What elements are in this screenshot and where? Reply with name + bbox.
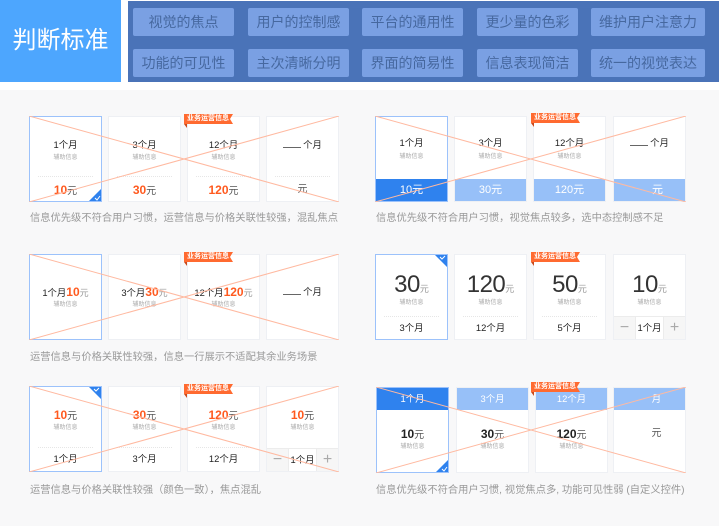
card: 10 yuan with stepper: 辅助信息 — [637, 300, 662, 306]
title — [0, 0, 121, 82]
card: 1 month selected: 辅助信息 — [400, 444, 424, 450]
card: 3 months: 辅助信息 — [480, 444, 504, 450]
card: 1 month selected: 1个月10元 — [42, 285, 89, 299]
tag: business info — [184, 252, 233, 266]
criterion button — [248, 8, 349, 36]
tag: business info: 业务运营信息 — [534, 253, 576, 260]
criterion button — [477, 8, 578, 36]
cross-out lines — [375, 116, 686, 202]
card: 120 yuan: 辅助信息 — [478, 300, 502, 306]
card: 3 months: 辅助信息 — [132, 425, 156, 431]
panel: option group row 2 right (recommended) — [375, 252, 686, 340]
card: 12 months: 12个月 — [209, 139, 238, 150]
card: 12 months: 120元 — [555, 184, 584, 196]
card: 3 months — [108, 386, 181, 472]
card: 50 yuan: 辅助信息 — [557, 300, 582, 306]
caption: 信息优先级不符合用户习惯，运营信息与价格关联性较强，混乱焦点 — [30, 213, 338, 224]
card: 30 yuan selected — [375, 254, 448, 340]
card: 10 yuan with stepper: − — [620, 319, 629, 336]
card: 1 month selected — [376, 387, 449, 473]
criterion button: 主次清晰分明 — [256, 55, 340, 71]
card: 1 month selected: 1个月 — [54, 139, 77, 150]
caption: 信息优先级不符合用户习惯, 视觉焦点多, 功能可见性弱 (自定义控件) — [376, 485, 685, 496]
card: 12 months — [533, 116, 606, 202]
criterion button — [477, 49, 578, 77]
card: 1 month selected — [29, 254, 102, 340]
card: 12 months: 辅助信息 — [211, 155, 236, 161]
criterion button — [133, 8, 234, 36]
criterion button — [362, 49, 463, 77]
card: stepper: + — [323, 451, 332, 468]
card: 1 month selected: 辅助信息 — [53, 302, 78, 308]
tag: business info — [531, 382, 580, 396]
card: 3 months: 辅助信息 — [478, 154, 502, 160]
card: 1 month selected — [29, 116, 102, 202]
panel: criteria list — [128, 1, 719, 82]
card: 12 months: 12个月 — [209, 453, 238, 464]
card: custom months — [266, 116, 339, 202]
caption: 运营信息与价格关联性较强，信息一行展示不适配其余业务场景 — [30, 352, 317, 363]
caption: 运营信息与价格关联性较强（颜色一致），焦点混乱 — [30, 485, 261, 496]
panel: option group row 3 right — [376, 382, 686, 473]
tag: business info: 业务运营信息 — [187, 115, 229, 122]
card: 12 months: 120元 — [208, 408, 239, 422]
card: 3 months: 3个月 — [479, 137, 502, 148]
tag: business info: 业务运营信息 — [534, 114, 576, 121]
card: 12 months: 辅助信息 — [559, 444, 584, 450]
criterion button: 维护用户注意力 — [599, 14, 697, 30]
card: 1 month selected: 辅助信息 — [399, 154, 424, 160]
tag: business info: 业务运营信息 — [187, 385, 229, 392]
card: 3 months — [454, 116, 527, 202]
card: 1 month selected: 辅助信息 — [53, 425, 78, 431]
card: 3 months: 30元 — [133, 408, 156, 422]
card: 3 months: 3个月 — [481, 393, 504, 404]
card: custom months: 元 — [298, 184, 308, 195]
card: custom months — [613, 387, 686, 473]
card: 1 month selected — [375, 116, 448, 202]
caption: 信息优先级不符合用户习惯，视觉焦点较多，选中态控制感不足 — [376, 213, 663, 224]
title: 判断标准 — [12, 27, 108, 54]
card: 1 month selected: 10元 — [54, 408, 77, 422]
card: 3 months: 3个月 — [133, 453, 156, 464]
card: 12 months: 12个月 — [555, 137, 584, 148]
panel: option group row 2 left — [29, 252, 339, 340]
tag: business info — [531, 252, 580, 266]
card: 10 yuan with stepper: 10元 — [632, 271, 667, 298]
card: 10 yuan with stepper: 1个月 — [638, 322, 661, 333]
card: 30 yuan selected: 3个月 — [400, 322, 423, 333]
card: 1 month selected: 1个月 — [401, 393, 424, 404]
card: custom months: 月 — [652, 393, 661, 404]
card: 1 month selected: 10元 — [400, 184, 423, 196]
card: 12 months — [187, 116, 260, 202]
tag: business info — [531, 113, 580, 127]
card: stepper: − — [273, 451, 282, 468]
card: custom months: 元 — [652, 184, 663, 196]
cross-out lines — [29, 386, 339, 472]
card: 12 months: 辅助信息 — [211, 425, 236, 431]
criterion button: 统一的视觉表达 — [599, 55, 697, 71]
card: 3 months: 30元 — [133, 183, 156, 197]
cross-out lines — [29, 116, 339, 202]
card: 12 months: 辅助信息 — [211, 302, 236, 308]
card: custom months — [613, 116, 686, 202]
card: 1 month selected: 1个月 — [400, 137, 423, 148]
card: 12 months: 12个月120元 — [194, 285, 253, 299]
card: 3 months: 辅助信息 — [132, 302, 156, 308]
criterion button — [591, 49, 705, 77]
criterion button: 信息表现简洁 — [486, 55, 570, 71]
card: custom months: 元 — [652, 428, 662, 439]
card: 10 yuan with stepper: + — [670, 319, 679, 336]
card: 1 month selected — [29, 386, 102, 472]
tag: business info: 业务运营信息 — [534, 383, 576, 390]
criterion button: 更少量的色彩 — [486, 14, 570, 30]
card: 12 months: 120元 — [556, 427, 587, 441]
card: 120 yuan — [454, 254, 527, 340]
card: 3 months: 30元 — [481, 427, 504, 441]
card: 1 month selected: 1个月 — [54, 453, 77, 464]
card: 12 months — [187, 386, 260, 472]
card: 3 months — [108, 116, 181, 202]
criterion button — [248, 49, 349, 77]
card: 1 month selected: 10元 — [401, 427, 424, 441]
card: 10 yuan with stepper — [613, 254, 686, 340]
cross-out lines — [376, 387, 686, 473]
card: 12 months: 12个月 — [557, 393, 586, 404]
tag: business info — [184, 384, 233, 398]
criterion button: 功能的可见性 — [142, 55, 226, 71]
criterion button — [362, 8, 463, 36]
card: 50 yuan — [533, 254, 606, 340]
criterion button — [591, 8, 705, 36]
card: 3 months — [108, 254, 181, 340]
card: stepper — [266, 386, 339, 472]
tag: business info — [184, 114, 233, 128]
card: stepper: 辅助信息 — [290, 425, 314, 431]
criterion button: 视觉的焦点 — [148, 14, 218, 30]
card: 12 months: 辅助信息 — [557, 154, 582, 160]
criterion button: 用户的控制感 — [256, 14, 340, 30]
card: 1 month selected: 辅助信息 — [53, 155, 78, 161]
card: custom months: 个月 — [650, 137, 669, 148]
card: stepper: 10元 — [291, 408, 314, 422]
card: 12 months — [187, 254, 260, 340]
card: custom months: 个月 — [303, 286, 322, 297]
card: 3 months: 30元 — [479, 184, 502, 196]
card: 3 months — [456, 387, 529, 473]
card: 12 months — [535, 387, 608, 473]
cross-out lines — [29, 254, 339, 340]
card: 1 month selected: 10元 — [54, 183, 77, 197]
card: 120 yuan: 120元 — [467, 271, 514, 298]
card: 3 months: 3个月30元 — [121, 285, 168, 299]
criterion button: 界面的简易性 — [370, 55, 454, 71]
card: 30 yuan selected: 辅助信息 — [399, 300, 424, 306]
card: 3 months: 辅助信息 — [132, 155, 156, 161]
tag: business info: 业务运营信息 — [187, 253, 229, 260]
panel: option group row 3 left — [29, 384, 339, 472]
card: custom months: 个月 — [303, 139, 322, 150]
panel: option group row 1 left — [29, 114, 339, 202]
card: 50 yuan: 5个月 — [558, 322, 581, 333]
card: 12 months: 120元 — [208, 183, 239, 197]
card: 30 yuan selected: 30元 — [394, 271, 429, 298]
criterion button: 平台的通用性 — [370, 14, 454, 30]
panel: option group row 1 right — [375, 113, 686, 202]
card: custom months — [266, 254, 339, 340]
card: 50 yuan: 50元 — [552, 271, 587, 298]
criterion button — [133, 49, 234, 77]
card: stepper: 1个月 — [291, 454, 314, 465]
card: 3 months: 3个月 — [133, 139, 156, 150]
card: 120 yuan: 12个月 — [476, 322, 505, 333]
